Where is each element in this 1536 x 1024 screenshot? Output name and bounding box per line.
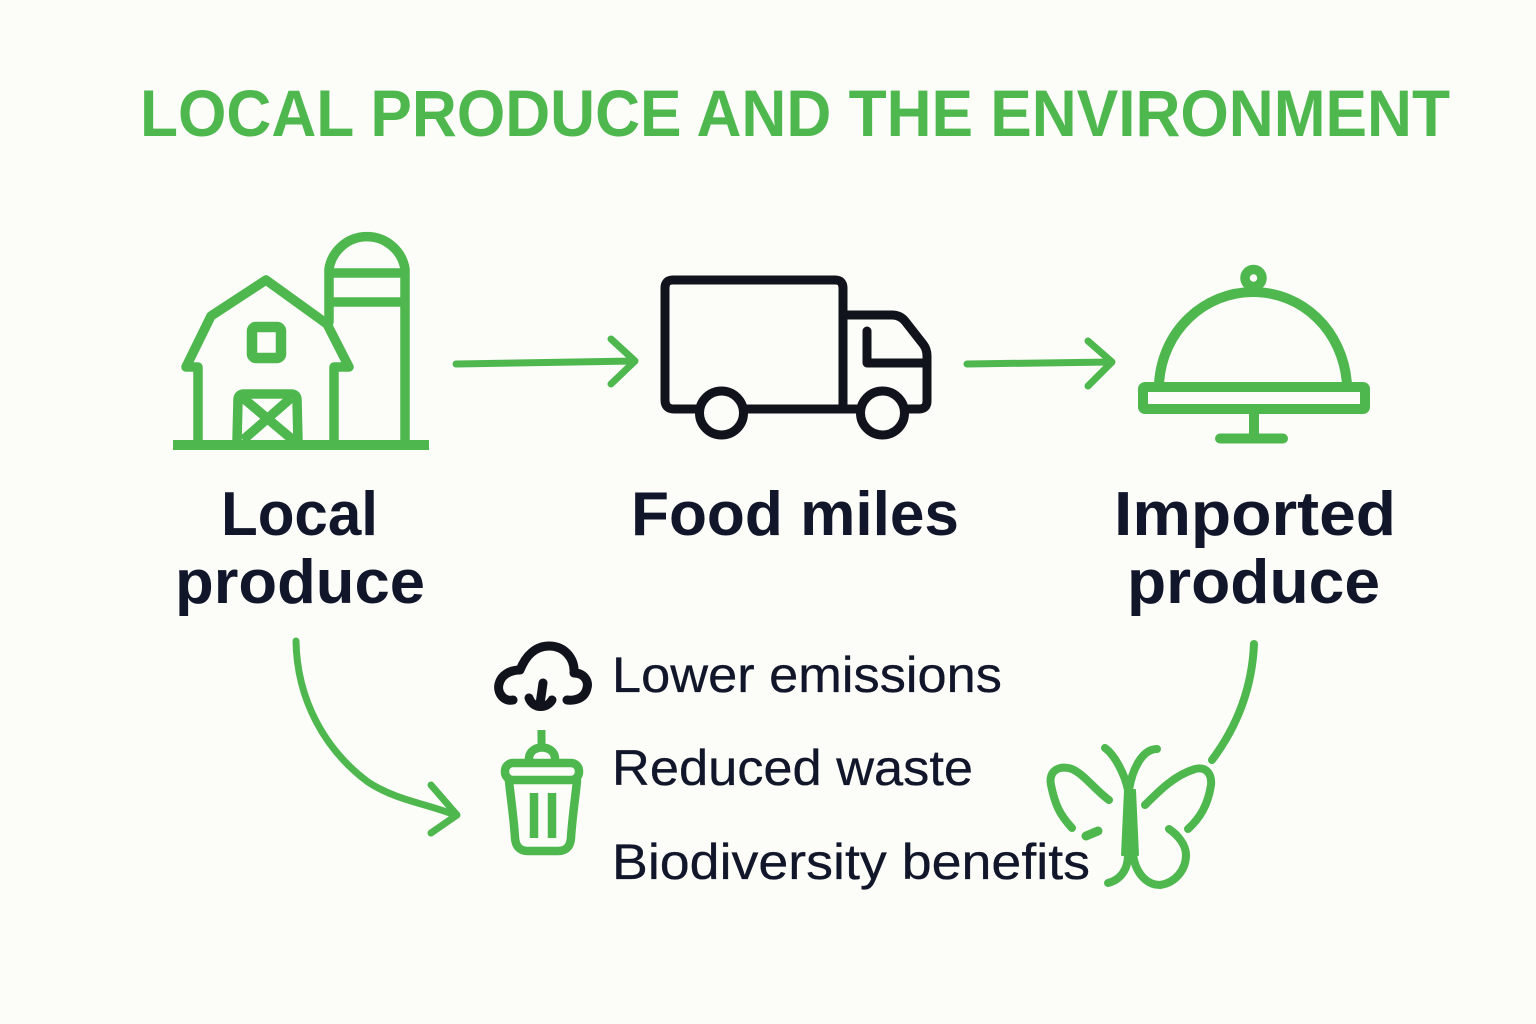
arrow: local produce to food miles [456, 339, 635, 384]
label: local produce: produce [175, 548, 425, 617]
label: imported produce [1114, 480, 1396, 617]
icon: trash bin [505, 730, 579, 851]
label: local produce [175, 480, 425, 617]
icon: barn and silo [173, 237, 429, 445]
arrow: local produce to benefits [296, 641, 457, 833]
icon: butterfly [1051, 748, 1211, 885]
label: local produce: Local [221, 480, 378, 549]
label: imported produce: produce [1127, 548, 1380, 617]
text: lower emissions: Lower emissions [612, 647, 1002, 703]
title: LOCAL PRODUCE AND THE ENVIRONMENT [140, 76, 1450, 150]
label: food miles: Food miles [631, 480, 959, 549]
label: imported produce: Imported [1114, 480, 1396, 549]
text: reduced waste: Reduced waste [612, 740, 973, 796]
text: biodiversity benefits: Biodiversity benefits [612, 834, 1090, 890]
arrow: imported produce to benefits [1212, 644, 1254, 760]
icon: cloud with down arrow [499, 646, 587, 707]
icon: delivery truck [665, 280, 927, 435]
icon: serving cloche [1143, 270, 1365, 438]
arrow: food miles to imported produce [967, 341, 1112, 386]
